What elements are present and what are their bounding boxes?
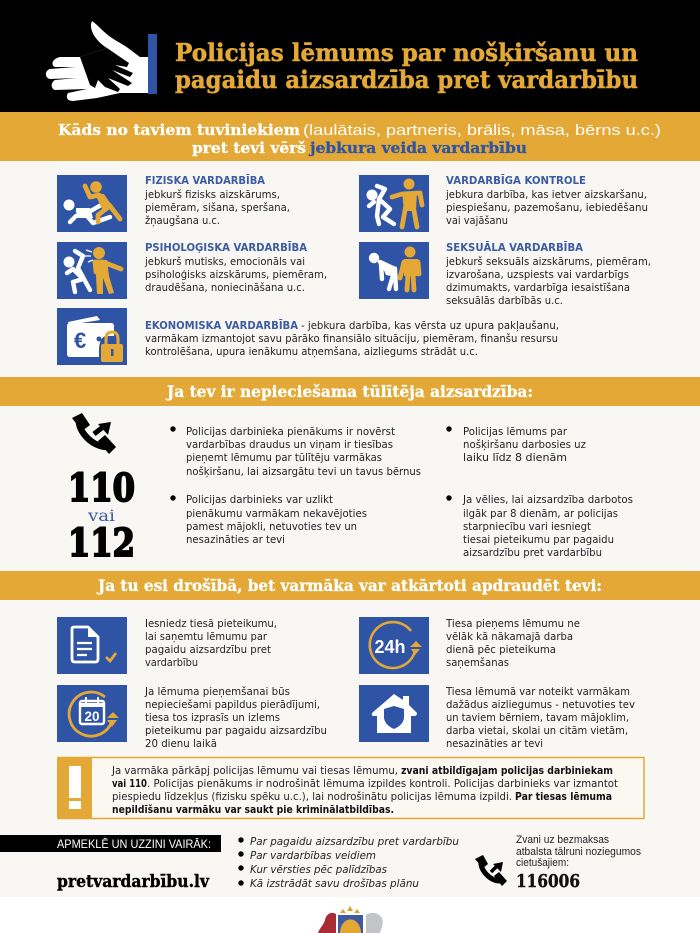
panel: emergency numbers: [68, 413, 135, 565]
bullet list: left column: Policijas darbinieka pienākums ir novērst: [186, 425, 396, 438]
description: izvarošana, uzspiests vai vardarbīgs: [446, 268, 629, 281]
panel: physical violence: [57, 174, 290, 232]
description: [144, 255, 327, 294]
description: kontrolēšana, upura ienākumu atņemšana, aizliegums strādāt u.c.: [145, 345, 478, 358]
description: EKONOMISKA VARDARBĪBA: [145, 319, 299, 332]
description: nepieciešami papildus pierādījumi,: [145, 698, 320, 711]
bullet list: right column: starpniecību vari iesniegt: [463, 520, 592, 533]
bullet list: left column: Policijas darbinieks var uzlikt: [186, 493, 334, 506]
description: [145, 319, 559, 358]
description: [445, 188, 648, 227]
description: dzimumakts, vardarbīga iesaistīšana: [446, 281, 630, 294]
bullet list: right column: [446, 425, 633, 559]
bullet list: right column: Ja vēlies, lai aizsardzība darbotos: [462, 493, 633, 506]
description: psiholoģisks aizskārums, piemēram,: [145, 268, 327, 281]
bullet list: left column: pamest mājokli, netuvoties tev un: [186, 520, 357, 533]
footer: topic list: Kā izstrādāt savu drošības plānu: [250, 877, 419, 890]
footer: support line: 116006: [516, 872, 580, 892]
description: varmākam izmantojot savu pārāko finansiālo situāciju, piemēram, finanšu resursu: [145, 332, 558, 345]
bullet list: right column: Policijas lēmums par: [463, 425, 567, 438]
icon: phone: [475, 855, 507, 886]
number 110: 110: [68, 465, 135, 510]
bullet list: right column: tiesai pieteikumu par pagaidu: [463, 533, 614, 546]
description: [145, 617, 277, 669]
warning text: piespiedu līdzekļus (fizisku spēku u.c.), lai nodrošinātu policijas lēmuma izpildi.: [112, 791, 512, 803]
label vai: vai: [87, 507, 115, 525]
bullet list: left column: nesazināties ar tevi: [186, 533, 285, 546]
description: seksuālās darbībās u.c.: [446, 294, 563, 307]
title: Policijas lēmums par nošķiršanu un: [175, 38, 638, 67]
title: [175, 38, 638, 94]
description: tiesa tos izprasīs un izlems: [145, 711, 280, 724]
icon: helping hands: [46, 21, 157, 101]
description: [445, 617, 580, 669]
warning text: Par tiesas lēmuma: [515, 792, 612, 803]
footer: support line: cietušajiem:: [516, 857, 569, 869]
description: piemēram, sišana, speršana,: [145, 201, 290, 214]
warning text: . Policijas pienākums ir nodrošināt lēmuma izpildes kontroli. Policijas darbinieks var izmantot: [147, 778, 618, 790]
description: jebkurš seksuāls aizskārums, piemēram,: [445, 255, 651, 268]
description: Tiesa lēmumā var noteikt varmākam: [445, 685, 630, 698]
icon: psychological abuse: [57, 242, 127, 299]
description: jebkurš mutisks, emocionāls vai: [144, 255, 305, 268]
icon: 24h clock: 24h: [374, 637, 406, 657]
footer: visit website: APMEKLĒ UN UZZINI VAIRĀK:: [57, 839, 211, 851]
footer: topic list: [238, 835, 459, 890]
description: lai saņemtu lēmumu par: [145, 630, 267, 643]
description: žņaugšana u.c.: [145, 214, 220, 227]
bullet list: left column: [170, 425, 421, 546]
description: [445, 255, 651, 307]
description: piespiešanu, pazemošanu, iebiedēšanu: [446, 201, 648, 214]
warning text: [111, 766, 618, 816]
heading: VARDARBĪGA KONTROLE: [446, 174, 586, 187]
bullet list: right column: laiku līdz 8 dienām: [463, 451, 567, 464]
description: dažādus aizliegumus - netuvoties tev: [446, 698, 636, 711]
panel: economic violence: [57, 308, 559, 365]
banner: intro: pret tevi vērš: [192, 139, 306, 157]
description: draudēšana, noniecināšana u.c.: [145, 281, 305, 294]
panel: 24 hours: [359, 617, 580, 674]
description: jebkura darbība, kas ietver aizskaršanu,: [445, 188, 647, 201]
description: vai vajāšanu: [446, 214, 508, 227]
icon: house with shield: [359, 685, 429, 742]
description: [445, 685, 636, 750]
title: pagaidu aizsardzība pret vardarbību: [175, 65, 638, 94]
description: Iesniedz tiesā pieteikumu,: [145, 617, 277, 630]
white bottom strip: [0, 897, 700, 933]
banner: immediate protection: [0, 377, 700, 406]
description: [144, 685, 327, 750]
footer: topic list: Par vardarbības veidiem: [250, 849, 376, 862]
bullet list: right column: ilgāk par 8 dienām, ar policijas: [463, 507, 618, 520]
panel: controlling violence: [359, 174, 648, 232]
panel: 20 days: [57, 685, 327, 750]
description: jebkurš fizisks aizskārums,: [144, 188, 280, 201]
banner: safe but threatened: Ja tu esi drošībā, bet varmāka var atkārtoti apdraudēt tevi:: [96, 576, 602, 595]
banner: safe but threatened: [0, 571, 700, 600]
panel: psychological violence: [57, 241, 327, 299]
banner: intro: [0, 112, 700, 161]
icon: phone: [72, 413, 116, 454]
footer: support line: atbalsta tālruni noziegumos: [516, 846, 642, 858]
description: 20 dienu laikā: [145, 737, 217, 750]
banner: intro: (laulātais, partneris, brālis, māsa, bērns u.c.): [303, 122, 661, 139]
header: [0, 0, 700, 112]
bullet list: left column: pieņemt lēmumu par tūlītēju varmākas: [186, 451, 382, 464]
warning text: zvani atbildīgajam policijas darbiniekam: [401, 766, 613, 777]
banner: intro: jebkura veida vardarbību: [308, 139, 527, 157]
panel: sexual violence: [359, 241, 651, 307]
description: un taviem bērniem, tavam mājoklim,: [446, 711, 629, 724]
bullet list: left column: vardarbības draudus un viņam ir tiesības: [186, 438, 393, 451]
banner: immediate protection: Ja tev ir nepieciešama tūlītēja aizsardzība:: [165, 382, 533, 401]
description: nesazināties ar tevi: [446, 737, 543, 750]
icon: wallet and lock: [57, 308, 127, 365]
description: Ja lēmuma pieņemšanai būs: [144, 685, 290, 698]
footer: support line: [475, 834, 642, 892]
icon: 24h clock: [359, 617, 429, 674]
heading: SEKSUĀLA VARDARBĪBA: [446, 241, 584, 254]
description: dienā pēc pieteikuma: [446, 643, 556, 656]
bullet list: left column: pienākumu varmākam nekavējoties: [186, 507, 367, 520]
icon: calendar 20: 20: [84, 709, 100, 724]
number 112: 112: [68, 520, 135, 565]
icon: wallet and lock: €: [74, 328, 86, 353]
bullet list: right column: nošķiršanu darbosies uz: [463, 438, 586, 451]
banner: intro: Kāds no taviem tuviniekiem: [58, 121, 300, 139]
description: [144, 188, 290, 227]
description: pagaidu aizsardzību pret: [145, 643, 272, 656]
description: Tiesa pieņems lēmumu ne: [445, 617, 580, 630]
description: - jebkura darbība, kas vērsta uz upura pakļaušanu,: [301, 319, 559, 332]
warning text: vai 110: [112, 779, 147, 790]
heading: FIZISKA VARDARBĪBA: [145, 174, 266, 187]
footer: visit website: pretvardarbību.lv: [57, 872, 210, 892]
heading: PSIHOLOĢISKA VARDARBĪBA: [145, 241, 308, 254]
footer: visit website: [0, 835, 221, 892]
icon: exclamation mark: [57, 757, 92, 819]
icon: coat of arms: [318, 906, 383, 933]
icon: physical assault: [57, 175, 127, 232]
panel: submit application: [57, 617, 277, 674]
warning text: Ja varmāka pārkāpj policijas lēmumu vai tiesas lēmumu,: [111, 766, 398, 777]
description: darba vietai, skolai un citām vietām,: [446, 724, 628, 737]
panel: restrictions: [359, 685, 636, 750]
icon: calendar 20: [57, 685, 127, 742]
footer: support line: Zvani uz bezmaksas: [516, 834, 610, 846]
description: vardarbību: [145, 656, 198, 669]
description: vēlāk kā nākamajā darba: [446, 630, 573, 643]
warning text: nepildīšanu varmāku var saukt pie kriminālatbildības.: [112, 804, 394, 816]
icon: sexual assault: [359, 242, 429, 299]
description: pieteikumu par pagaidu aizsardzību: [145, 724, 327, 737]
icon: coercive control: [359, 175, 429, 232]
callout: warning: [57, 757, 644, 819]
page background: [0, 161, 700, 897]
icon: document with check: [57, 617, 127, 674]
footer: topic list: Par pagaidu aizsardzību pret vardarbību: [250, 835, 459, 848]
description: saņemšanas: [446, 656, 509, 669]
footer: topic list: Kur vērsties pēc palīdzības: [250, 863, 387, 876]
bullet list: left column: nošķiršanu, lai aizsargātu tevi un tavus bērnus: [186, 465, 421, 478]
bullet list: right column: aizsardzību pret vardarbību: [463, 546, 602, 559]
